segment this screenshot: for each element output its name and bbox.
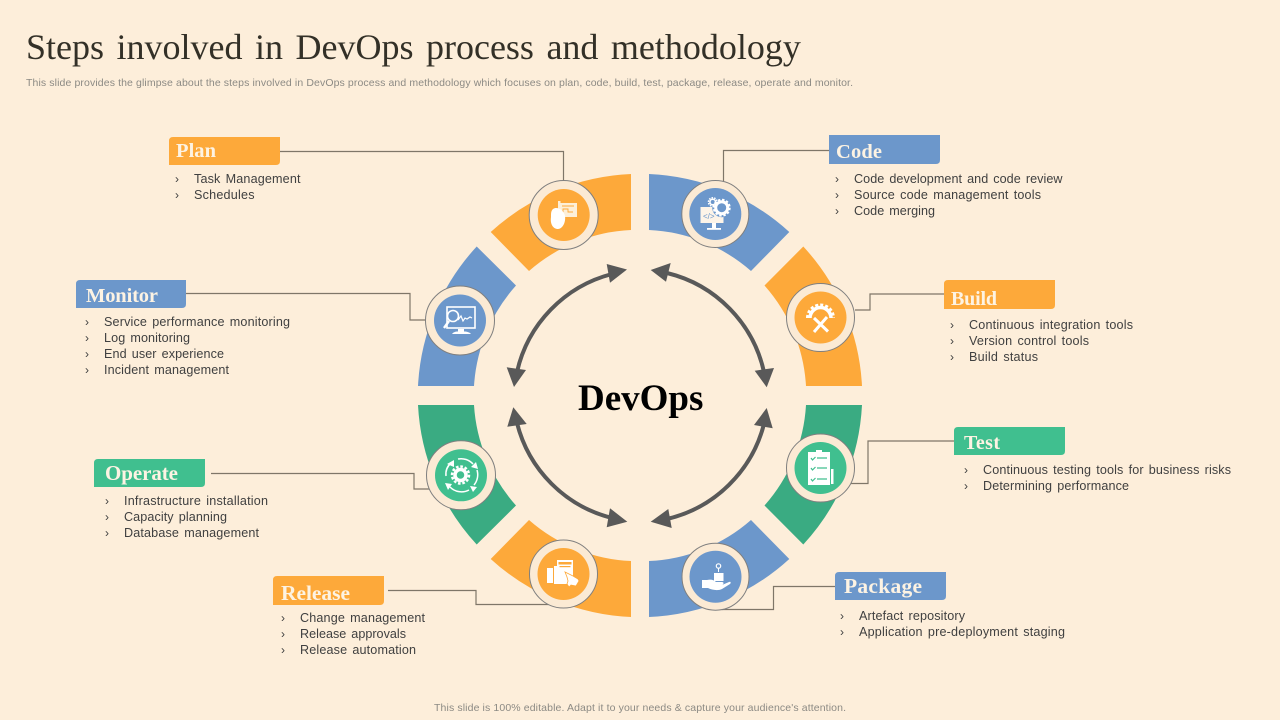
node: Package bbox=[682, 543, 749, 610]
label: Plan bbox=[169, 137, 280, 165]
list: Monitor bbox=[85, 315, 290, 377]
list: Release: Release automation bbox=[300, 643, 416, 657]
connector: Operate bbox=[211, 474, 430, 489]
arrow: bottom right bbox=[651, 408, 773, 528]
segment: Package bbox=[649, 520, 789, 617]
label: Operate bbox=[94, 459, 205, 487]
segment: Code bbox=[649, 174, 789, 271]
list: Operate: Database management bbox=[124, 526, 260, 540]
label: Package: Package bbox=[844, 574, 922, 598]
list: Test: Determining performance bbox=[983, 479, 1129, 493]
list: Operate: Capacity planning bbox=[124, 510, 227, 524]
list: Code: › bbox=[835, 172, 839, 186]
segment: Release bbox=[491, 520, 631, 617]
label: Operate: Operate bbox=[105, 461, 178, 485]
segment: Build bbox=[764, 246, 862, 386]
list: Release: › bbox=[281, 627, 285, 641]
list: Monitor: Incident management bbox=[104, 363, 230, 377]
arrow: top left bbox=[507, 264, 627, 387]
label: Plan: Plan bbox=[176, 140, 217, 162]
list: Package: › bbox=[840, 625, 844, 639]
list: Plan: Schedules bbox=[194, 188, 254, 202]
list: Monitor: Service performance monitoring bbox=[104, 315, 290, 329]
list: Operate: › bbox=[105, 510, 109, 524]
list: Release: › bbox=[281, 643, 285, 657]
segment: Monitor bbox=[418, 246, 516, 386]
list: Code: Code merging bbox=[854, 204, 935, 218]
label: Release bbox=[273, 576, 384, 605]
list: Package: Application pre-deployment staging bbox=[859, 625, 1065, 639]
list: Build: Continuous integration tools bbox=[969, 318, 1133, 332]
step: Code bbox=[649, 135, 1063, 271]
list: Release: › bbox=[281, 611, 285, 625]
list: Monitor: › bbox=[85, 315, 89, 329]
list: Operate: › bbox=[105, 494, 109, 508]
list: Operate: › bbox=[105, 526, 109, 540]
list: Package: › bbox=[840, 609, 844, 623]
connector: Code bbox=[724, 150, 829, 181]
list: Build: › bbox=[950, 350, 954, 364]
list: Build: Version control tools bbox=[969, 334, 1089, 348]
arrows: cycle around DevOps bbox=[507, 263, 774, 528]
list: Monitor: End user experience bbox=[104, 347, 224, 361]
step: Operate bbox=[94, 405, 516, 544]
label: Build bbox=[944, 280, 1055, 310]
list: Code: Code development and code review bbox=[854, 172, 1063, 186]
list: Build: Build status bbox=[969, 350, 1038, 364]
label: Monitor: Monitor bbox=[86, 285, 158, 307]
icon: gear with cycle arrows bbox=[445, 459, 478, 492]
list: Monitor: › bbox=[85, 347, 89, 361]
list: Monitor: › bbox=[85, 331, 89, 345]
list: Plan: › bbox=[175, 188, 179, 202]
subtitle: This slide provides the glimpse about the steps involved in DevOps process and methodology which focuses on plan, code, build, test, package, release, operate and monitor. bbox=[26, 77, 853, 89]
label: Monitor bbox=[76, 280, 186, 308]
list: Release: Change management bbox=[300, 611, 426, 625]
node: Code bbox=[682, 180, 749, 248]
list: Plan: Task Management bbox=[194, 172, 301, 186]
icon: document with pointing hand bbox=[547, 560, 579, 587]
icon: gear and tools bbox=[808, 305, 834, 332]
list: Build: › bbox=[950, 318, 954, 332]
list: Monitor: › bbox=[85, 363, 89, 377]
list: Test: › bbox=[964, 463, 968, 477]
connector: Test bbox=[850, 441, 954, 484]
label: Code: Code bbox=[836, 141, 882, 163]
node: Monitor bbox=[426, 286, 494, 355]
list: Plan: › bbox=[175, 172, 179, 186]
segment: Plan bbox=[491, 174, 631, 271]
icon: hand with box bbox=[702, 564, 731, 590]
list: Build: › bbox=[950, 334, 954, 348]
step: Release bbox=[273, 520, 631, 657]
step: Monitor bbox=[76, 246, 516, 386]
connector: Plan bbox=[280, 152, 564, 181]
step: Test bbox=[764, 405, 1231, 544]
list: Release bbox=[281, 611, 426, 657]
list: Operate: Infrastructure installation bbox=[124, 494, 268, 508]
list: Monitor: Log monitoring bbox=[104, 331, 190, 345]
label: Release: Release bbox=[281, 581, 350, 605]
label: Test: Test bbox=[964, 432, 1000, 454]
list: Test: Continuous testing tools for business risks bbox=[983, 463, 1231, 477]
arrow: top right bbox=[651, 263, 774, 387]
list: Code: › bbox=[835, 188, 839, 202]
center label: DevOps: DevOps bbox=[578, 378, 703, 419]
connector: Package bbox=[722, 586, 835, 610]
node: Release bbox=[530, 540, 598, 608]
segment: Test bbox=[764, 405, 862, 544]
connector: Release bbox=[388, 590, 550, 604]
list: Release: Release approvals bbox=[300, 627, 406, 641]
list: Code: Source code management tools bbox=[854, 188, 1041, 202]
title: Steps involved in DevOps process and methodology bbox=[26, 27, 801, 67]
arrow: bottom left bbox=[507, 407, 627, 527]
list: Test bbox=[964, 463, 1231, 493]
node: Test bbox=[786, 434, 854, 502]
step: Package bbox=[649, 520, 1065, 639]
list: Plan bbox=[175, 172, 301, 202]
list: Code bbox=[835, 172, 1063, 218]
node: Build bbox=[786, 284, 854, 352]
step: Build bbox=[764, 246, 1133, 386]
label: Code bbox=[829, 135, 940, 164]
icon: monitor with gears: </> bbox=[703, 212, 715, 221]
node: Operate bbox=[426, 441, 496, 510]
list: Test: › bbox=[964, 479, 968, 493]
list: Package: Artefact repository bbox=[859, 609, 966, 623]
icon: hand holding plan bbox=[551, 201, 577, 229]
connector: Monitor bbox=[186, 294, 426, 320]
step: Plan bbox=[169, 137, 631, 271]
label: Package bbox=[835, 572, 946, 600]
list: Package bbox=[840, 609, 1065, 639]
segment: Operate bbox=[418, 405, 516, 544]
icon: checklist clipboard bbox=[808, 450, 834, 485]
list: Operate bbox=[105, 494, 268, 540]
list: Build bbox=[950, 318, 1133, 364]
icon: monitor with magnifier bbox=[444, 307, 475, 334]
label: Build: Build bbox=[951, 288, 997, 310]
list: Code: › bbox=[835, 204, 839, 218]
label: Test bbox=[954, 427, 1065, 455]
connector: Build bbox=[855, 294, 944, 310]
footer note: This slide is 100% editable. Adapt it to your needs & capture your audience's attention. bbox=[434, 702, 846, 714]
node: Plan bbox=[529, 180, 598, 250]
